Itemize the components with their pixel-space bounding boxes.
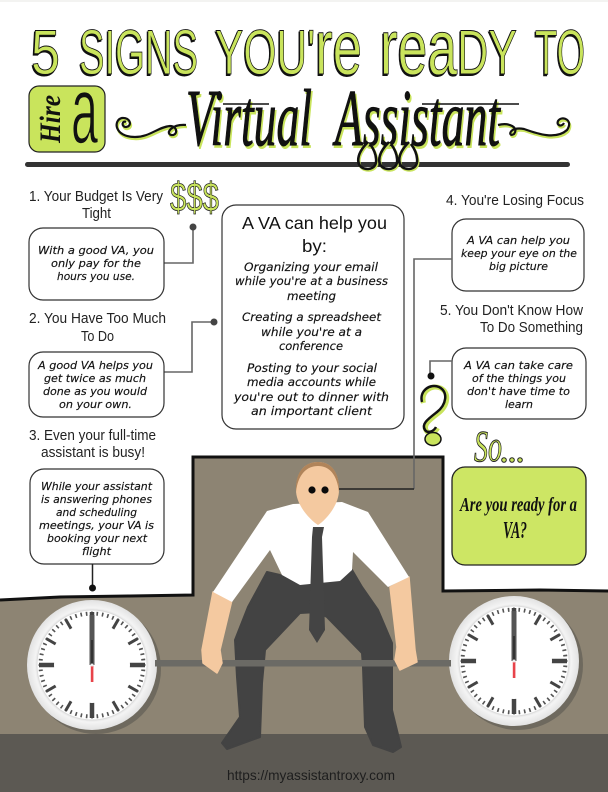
callout: don't know how: learn <box>505 399 533 411</box>
title line: 5 <box>30 20 59 90</box>
title line: SIGNS <box>79 18 198 88</box>
callout: busy assistant: flight <box>82 546 112 558</box>
callout: are you ready <box>452 467 586 565</box>
hire a badge: Hire <box>34 95 67 144</box>
callout: busy assistant: While your assistant <box>41 481 153 493</box>
callout: don't know how: A VA can take care <box>463 360 573 372</box>
hire a badge: a <box>71 57 98 164</box>
figure: man lifting barbell <box>155 462 451 752</box>
sign 4 heading: 4. You're Losing Focus <box>446 192 584 209</box>
callout: too much to do: done as you would <box>43 386 147 398</box>
panel: a VA can help you by: conference <box>279 339 343 353</box>
virtual assistant script title: Virtual <box>186 75 312 163</box>
connector: busy assistant <box>89 564 96 592</box>
sign 3 heading <box>29 427 156 461</box>
callout: budget: hours you use. <box>57 271 135 283</box>
callout: budget: With a good VA, you <box>38 245 154 257</box>
man: shirt <box>213 502 409 602</box>
callout: too much to do: on your own. <box>59 399 132 411</box>
callout: focus <box>452 219 584 291</box>
title line: reaDY <box>380 3 517 91</box>
connector: budget <box>164 224 196 263</box>
divider rule <box>25 162 570 167</box>
icon: dollar signs: $$$ <box>170 174 219 220</box>
callout: focus: big picture <box>489 261 548 273</box>
callout: don't know how: of the things you <box>472 373 566 385</box>
barbell bar <box>155 660 451 666</box>
callout: busy assistant: and scheduling <box>56 507 137 519</box>
panel: a VA can help you by: A VA can help you <box>242 213 387 233</box>
callout: don't know how <box>452 348 586 419</box>
callout: too much to do: get twice as much <box>44 373 146 385</box>
sign 5 heading <box>440 302 583 336</box>
panel: a VA can help you by: Organizing your email <box>244 260 379 274</box>
panel: a VA can help you by: media accounts while <box>247 375 376 389</box>
man: hair <box>296 462 339 492</box>
callout: focus: A VA can help you <box>466 235 570 247</box>
sign 3 heading: 3. Even your full-time <box>29 427 156 444</box>
sign 2 heading <box>29 310 166 345</box>
man: tie <box>309 527 325 643</box>
virtual assistant script title <box>117 75 570 170</box>
panel: a VA can help you by: by: <box>302 236 327 256</box>
callout: budget: only pay for the <box>51 258 141 270</box>
title line: YOU're <box>214 4 361 92</box>
man: eyes <box>308 486 329 494</box>
callout: too much to do <box>29 352 164 417</box>
callout: busy assistant: meetings, your VA is <box>39 520 155 532</box>
sign 1 heading <box>29 188 163 222</box>
title line: YOU're <box>215 3 362 91</box>
hire a badge <box>29 57 105 164</box>
man: head <box>296 462 339 525</box>
connector: focus to eyes <box>325 259 452 489</box>
connector: too much to do <box>164 318 218 372</box>
callout: focus: keep your eye on the <box>461 248 577 260</box>
sign 1 heading: Tight <box>82 205 112 222</box>
sign 2 heading: To Do <box>81 328 114 345</box>
panel: a VA can help you by: while you're at a business <box>235 274 388 288</box>
callout: budget <box>29 228 164 300</box>
panel: a VA can help you by: Posting to your social <box>247 361 378 375</box>
title line: SIGNS <box>78 20 197 90</box>
callout: too much to do: A good VA helps you <box>37 360 153 372</box>
panel: a VA can help you by <box>222 205 404 429</box>
so heading: So <box>474 422 502 471</box>
virtual assistant script title: Virtual <box>188 78 314 166</box>
sign 2 heading: 2. You Have Too Much <box>29 310 166 327</box>
callout: don't know how: don't have time to <box>467 386 570 398</box>
callout: busy assistant: booking your next <box>47 533 148 545</box>
scene background <box>0 457 608 792</box>
callout: busy assistant <box>30 469 164 564</box>
panel: a VA can help you by: Creating a spreadsheet <box>242 310 381 324</box>
sign 5 heading: 5. You Don't Know How <box>440 302 583 319</box>
title line: reaDY <box>379 4 516 92</box>
connector: don't know how <box>428 361 452 380</box>
panel: a VA can help you by: while you're at a <box>261 325 362 339</box>
sign 3 heading: assistant is busy! <box>41 444 145 461</box>
sign 5 heading: To Do Something <box>480 319 583 336</box>
sign 1 heading: 1. Your Budget Is Very <box>29 188 163 205</box>
panel: a VA can help you by: meeting <box>287 289 336 303</box>
panel: a VA can help you by: an important client <box>251 404 373 418</box>
clock: left <box>27 600 161 734</box>
callout: busy assistant: is answering phones <box>41 494 153 506</box>
man: arms <box>202 577 417 673</box>
callout: are you ready: VA? <box>503 518 527 544</box>
website url: https://myassistantroxy.com <box>227 767 395 783</box>
panel: a VA can help you by: you're out to dinner with <box>233 390 389 404</box>
man: trousers <box>222 570 401 752</box>
title line: 5 <box>31 18 60 88</box>
clock: right <box>449 596 583 730</box>
icon: question mark <box>421 386 447 446</box>
title line <box>30 3 585 92</box>
